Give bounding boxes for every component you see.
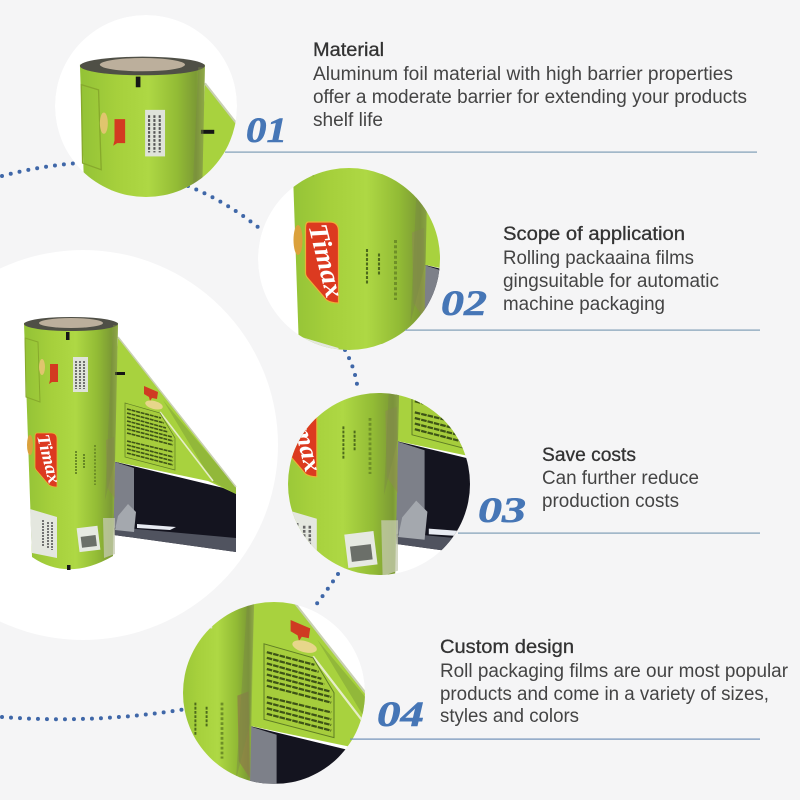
dotted connector paths [2, 163, 358, 719]
text block: scope of application [503, 224, 719, 315]
text block: material: offer a moderate barrier for extending your products [313, 87, 747, 108]
circle 3: barcode and film detail [288, 393, 470, 575]
text block: scope of application: machine packaging [503, 294, 665, 315]
leader line 02 [405, 330, 760, 331]
text block: scope of application: Rolling packaaina films [503, 248, 694, 269]
circle 4: unrolled sheet detail [183, 602, 365, 784]
text block: custom design [440, 637, 789, 727]
text block: save costs: Save costs [542, 445, 636, 466]
text block: custom design: styles and colors [440, 706, 579, 727]
text block: custom design: Roll packaging films are our most popular [440, 661, 789, 682]
large white circle behind main roll [0, 250, 278, 640]
circle 2: logo detail [258, 168, 440, 350]
text block: scope of application: gingsuitable for automatic [503, 271, 719, 292]
leader line 01 [225, 152, 757, 153]
text block: scope of application: Scope of application [503, 224, 685, 245]
number 04: 04 [377, 694, 424, 734]
text block: save costs: production costs [542, 491, 679, 512]
text block: custom design: products and come in a variety of sizes, [440, 684, 769, 705]
text block: material: shelf life [313, 110, 383, 131]
circle 1: roll top detail [55, 15, 237, 197]
text block: custom design: Custom design [440, 637, 574, 658]
text block: material [313, 40, 747, 131]
number 01: 01 [246, 110, 287, 150]
text block: material: Material [313, 40, 384, 61]
number 02: 02 [441, 283, 487, 323]
text block: material: Aluminum foil material with high barrier properties [313, 64, 733, 85]
leader line 04 [350, 738, 760, 740]
text block: save costs: Can further reduce [542, 468, 699, 489]
leader line 03 [458, 532, 760, 534]
number 03: 03 [478, 490, 526, 530]
main product image: film roll [24, 317, 236, 570]
text block: save costs [542, 445, 699, 512]
